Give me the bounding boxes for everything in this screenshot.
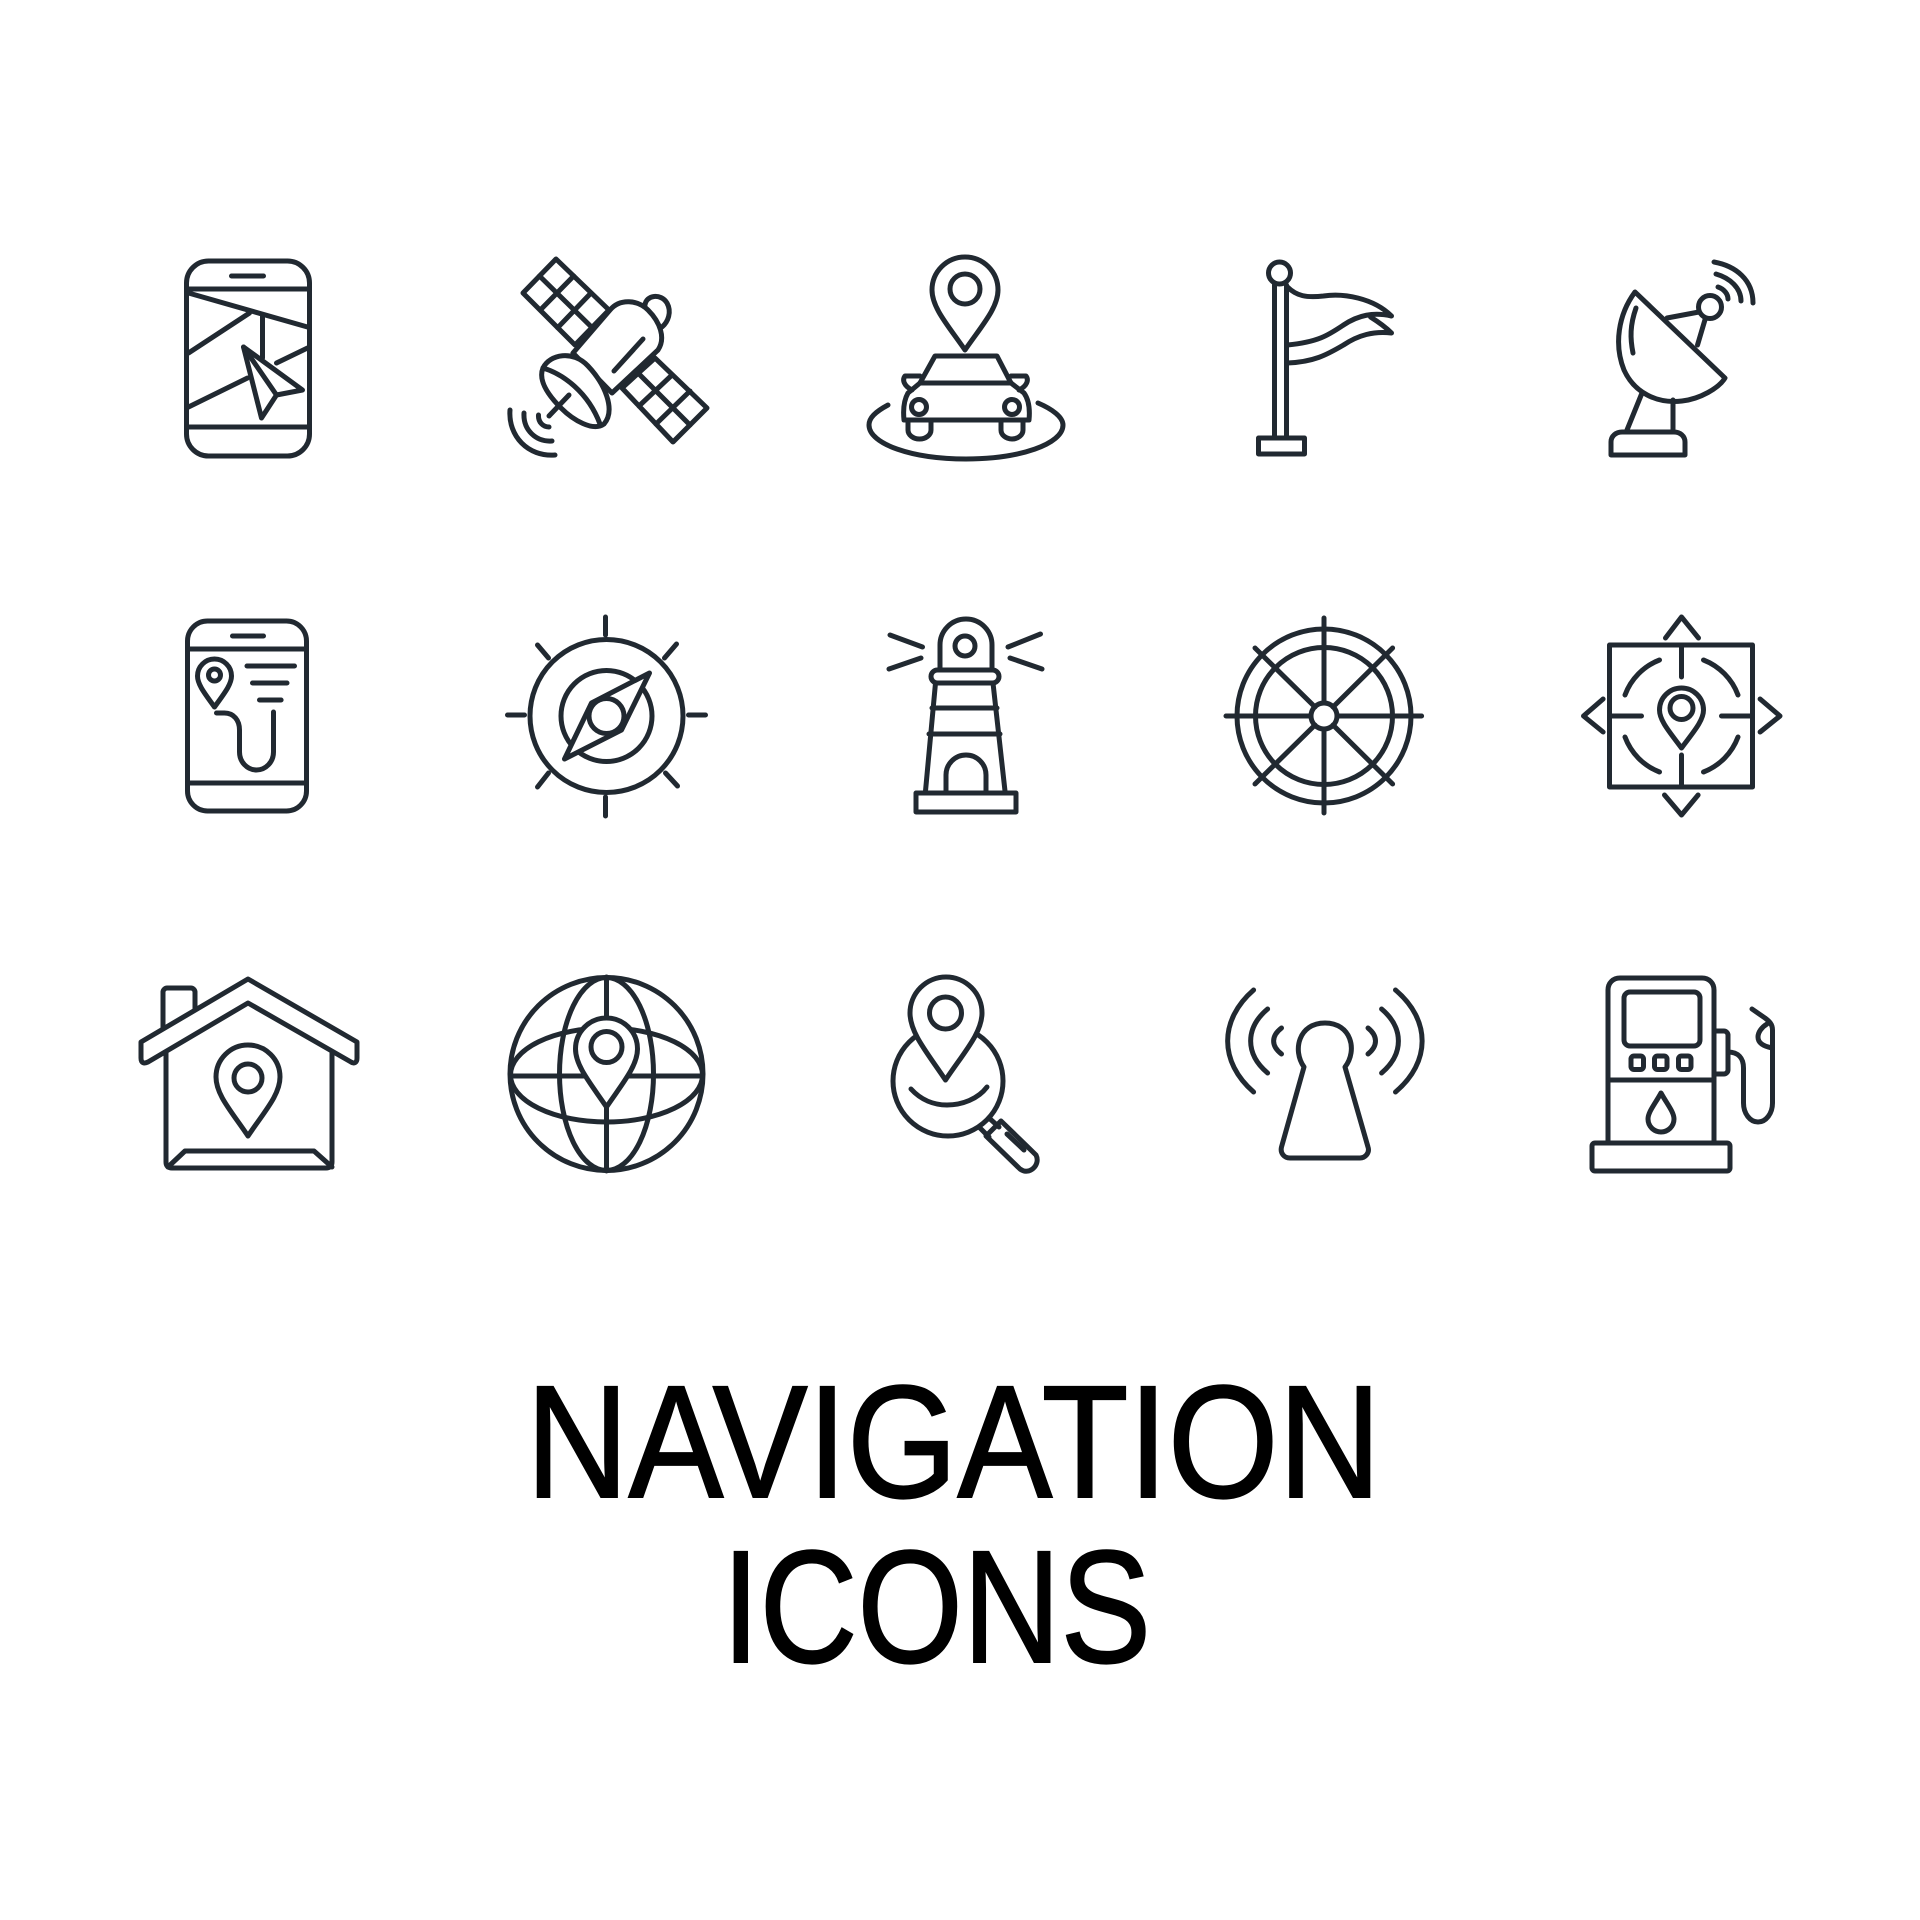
icon: fuel pump [1592, 978, 1772, 1171]
icon: flag on pole [1258, 262, 1392, 454]
icon: ship wheel [1226, 618, 1422, 813]
title [526, 1352, 1381, 1696]
icon: satellite [510, 259, 707, 455]
title: ICONS [722, 1517, 1151, 1696]
icon: globe with location pin [510, 977, 703, 1171]
icon: house with location pin [141, 979, 357, 1168]
icon: magnifier with location pin [893, 977, 1037, 1171]
icon: phone with map and arrow [186, 261, 310, 456]
icon: compass [508, 617, 706, 816]
icon: car with location pin [869, 257, 1063, 459]
icon: radio tower with signal waves [1228, 990, 1422, 1158]
icon: lighthouse [889, 619, 1042, 812]
icon: phone with route [188, 621, 306, 811]
icon: location target with arrows [1584, 617, 1780, 815]
title: NAVIGATION [526, 1352, 1381, 1531]
icon: satellite dish [1611, 262, 1753, 455]
